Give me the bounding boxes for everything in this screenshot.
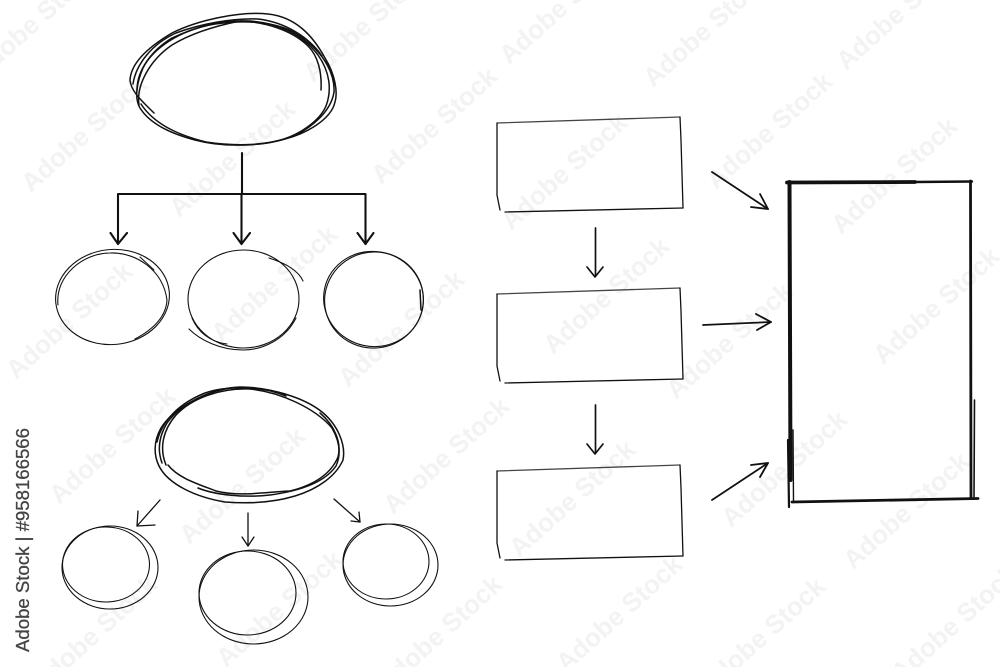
watermark pattern: Adobe Stock [365, 61, 503, 190]
watermark pattern: Adobe Stock [660, 276, 798, 405]
watermark pattern: Adobe Stock [825, 111, 963, 240]
arrow: box three to tall box [712, 463, 768, 500]
watermark pattern: Adobe Stock [377, 391, 515, 520]
box one [497, 117, 683, 212]
bottom circle left [62, 526, 158, 609]
top scribbled oval [130, 13, 336, 145]
arrow: box one to tall box [712, 172, 768, 209]
watermark pattern: Adobe Stock [837, 446, 975, 575]
watermark pattern: Adobe Stock [0, 256, 138, 385]
tree connector arrows [110, 153, 374, 244]
watermark pattern: Adobe Stock [495, 107, 633, 236]
stock id caption: Adobe Stock | #958166566 [13, 428, 33, 652]
watermark pattern: Adobe Stock [537, 231, 675, 360]
bottom scribbled oval [155, 387, 344, 503]
row one circle middle [188, 250, 303, 350]
arrow: box one to box two [587, 228, 603, 277]
row one circle left [51, 244, 174, 350]
watermark pattern: Adobe Stock [332, 264, 470, 393]
watermark pattern: Adobe Stock [503, 434, 641, 563]
watermark pattern: Adobe Stock [205, 219, 343, 348]
watermark pattern: Adobe Stock [700, 66, 838, 195]
box two [497, 288, 683, 383]
tall summary box [787, 181, 978, 507]
bottom small arrows [137, 499, 360, 546]
row one circle right [314, 241, 434, 359]
bottom circle right [343, 524, 438, 606]
watermark pattern: Adobe Stock [173, 421, 311, 550]
watermark pattern: Adobe Stock [43, 381, 181, 510]
arrow: box two to box three [587, 405, 603, 454]
watermark pattern: Adobe Stock [15, 69, 153, 198]
watermark pattern: Adobe Stock [163, 94, 301, 223]
watermark pattern: Adobe Stock [715, 404, 853, 533]
arrow: box two to tall box [703, 314, 771, 330]
bottom circle middle [199, 550, 308, 644]
box three [497, 465, 683, 560]
